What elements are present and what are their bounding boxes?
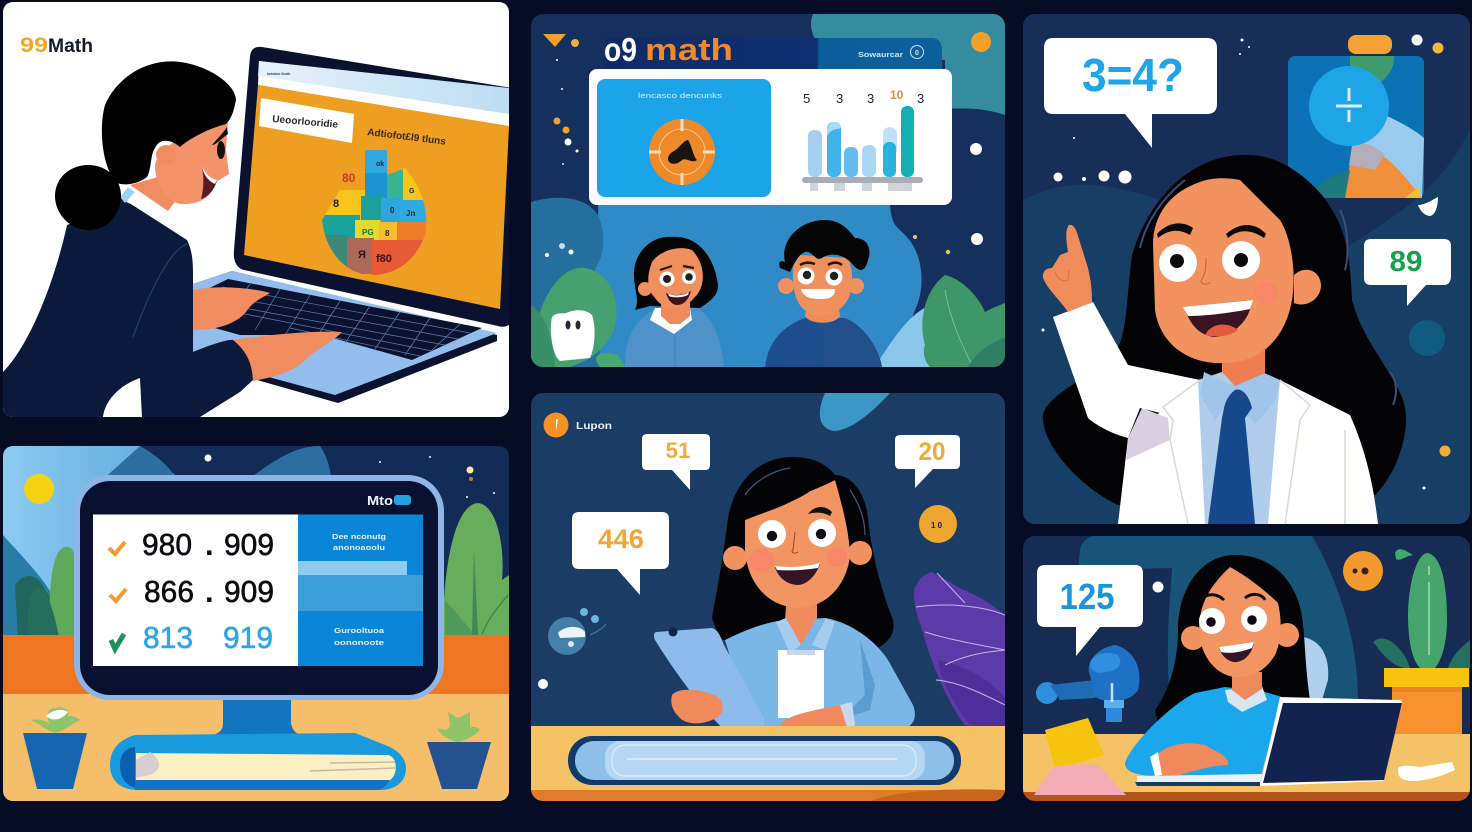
check mark <box>110 589 126 601</box>
girl student <box>625 237 724 367</box>
ears <box>1181 623 1299 650</box>
desk <box>531 726 1005 801</box>
teacher figure <box>3 61 342 417</box>
ear <box>1294 270 1321 304</box>
paper <box>778 650 824 718</box>
logo: o9 math: math <box>645 32 733 67</box>
sticky note <box>1045 718 1104 770</box>
bubble: 89: 89 <box>1390 246 1422 278</box>
laptop <box>1135 697 1402 786</box>
hair <box>102 61 236 184</box>
collar <box>776 618 835 653</box>
student figure <box>1125 555 1310 780</box>
sum rows: 980 <box>142 527 192 562</box>
blue side panel <box>298 514 423 666</box>
check mark <box>109 542 125 554</box>
left plant pot <box>23 707 87 789</box>
coat body <box>1118 380 1378 524</box>
screen title box: Ueoorlooridie <box>272 114 339 131</box>
face <box>1153 178 1294 363</box>
sum rows <box>109 527 274 655</box>
screen chart: Я <box>358 249 366 261</box>
hair <box>1043 155 1406 505</box>
crescent <box>1418 197 1438 216</box>
panel: student at desk with laptop <box>1023 536 1470 801</box>
blue background blobs <box>531 198 922 367</box>
teacher figure <box>1043 155 1406 524</box>
orange badge <box>919 505 957 543</box>
sum rows: . <box>205 574 214 609</box>
nose <box>1201 258 1210 284</box>
mouth <box>1183 300 1253 337</box>
ear <box>156 145 176 165</box>
lapels <box>1163 380 1345 524</box>
brows <box>1157 223 1266 238</box>
blue side panel: Gurooltuoa <box>334 626 385 635</box>
bubble: 446: 446 <box>598 524 644 554</box>
white dot <box>1152 582 1164 592</box>
panel: monitor with sums <box>3 446 509 801</box>
bubble: 125: 125 <box>1060 576 1114 617</box>
neck <box>1232 672 1262 700</box>
blue faucet object <box>1036 645 1139 722</box>
bar chart <box>802 88 924 191</box>
check mark <box>111 634 124 649</box>
eyes <box>758 519 836 548</box>
math card <box>1288 56 1424 198</box>
sweater <box>1125 687 1282 780</box>
white card <box>589 69 952 205</box>
left plant and mascot <box>531 268 625 367</box>
stars <box>204 454 495 498</box>
ground <box>3 635 509 801</box>
brand: Mto <box>367 493 393 508</box>
division icon <box>1309 66 1389 146</box>
logo: o9 math <box>605 38 731 62</box>
ears <box>723 541 872 570</box>
sum rows: 813 <box>143 620 193 655</box>
top <box>725 618 915 730</box>
blue shape <box>820 393 890 431</box>
screen chart: G <box>409 188 415 195</box>
bubble: 89 <box>1364 239 1451 306</box>
face <box>1199 567 1281 677</box>
desk <box>1023 734 1470 801</box>
face <box>745 480 850 608</box>
neck <box>785 592 817 645</box>
potted plant <box>1373 553 1470 735</box>
lower hand <box>233 332 342 381</box>
orange badge <box>1343 551 1383 591</box>
screen chart: 8 <box>333 198 339 210</box>
blue side panel: oononoote <box>334 638 384 647</box>
decorative dots <box>545 32 991 257</box>
blue tile: lencasco dencunks <box>638 93 723 100</box>
mouth <box>1219 642 1254 662</box>
mascot <box>551 310 595 361</box>
hand <box>1157 743 1228 775</box>
screen chart: ok <box>376 161 384 168</box>
mouth <box>775 563 820 585</box>
right plant pot <box>427 712 491 789</box>
hair bun <box>55 165 121 230</box>
blue tile <box>597 79 771 197</box>
sum rows: . <box>205 527 214 562</box>
upper hand <box>193 287 270 330</box>
header label <box>858 46 924 59</box>
blue side panel: anonoaoolu <box>333 543 386 552</box>
sum rows: 866 <box>144 574 194 609</box>
right hand <box>780 705 848 730</box>
screen chart: PG <box>362 228 374 237</box>
brows <box>1200 594 1265 600</box>
pink note <box>1034 764 1126 795</box>
decorative dots <box>1042 34 1450 490</box>
white object <box>1398 762 1455 781</box>
logo badge <box>544 412 612 438</box>
nose <box>208 150 228 178</box>
bar chart: 3 <box>867 91 874 106</box>
hair fringe <box>745 470 835 520</box>
logo: 99Math: 99 <box>20 34 48 57</box>
sky <box>3 446 175 700</box>
panel: teacher with white coat <box>1023 14 1470 524</box>
decorative triangle <box>543 34 566 47</box>
laptop base and keyboard <box>193 271 497 403</box>
bar chart: 3 <box>917 91 924 106</box>
neck <box>1222 350 1265 386</box>
orange pill <box>1348 35 1392 54</box>
brand <box>367 493 411 508</box>
bubble: 3=4?: 3=4? <box>1082 49 1184 101</box>
white dot <box>538 679 548 689</box>
nose <box>792 532 798 553</box>
neck <box>130 178 175 211</box>
hair <box>1155 555 1310 735</box>
hair <box>712 457 894 648</box>
bubble: 125 <box>1037 565 1143 656</box>
chair <box>1300 637 1328 700</box>
raised arm <box>1053 302 1200 438</box>
bar chart: 3 <box>836 91 843 106</box>
logo: o9 math: o9 <box>604 31 637 68</box>
sum rows: 909 <box>224 574 274 609</box>
header label: Sowaurcar <box>858 52 903 59</box>
panel: math dashboard with two students <box>531 14 1005 367</box>
sun <box>24 474 54 504</box>
student figure <box>654 457 915 731</box>
brow <box>808 507 832 516</box>
panel: teacher at laptop <box>3 2 512 417</box>
bubble: 3=4? <box>1044 38 1217 148</box>
book <box>568 736 961 785</box>
bubble: 446 <box>572 512 669 595</box>
screen chart: 0 <box>390 206 395 215</box>
shirt <box>1198 372 1280 524</box>
eyes <box>1199 606 1267 634</box>
logo badge: Lupon <box>576 421 612 432</box>
bar chart: 5 <box>803 91 810 106</box>
screen chart: 8 <box>385 229 390 238</box>
mouth <box>201 167 217 199</box>
purple leaves <box>914 572 1005 730</box>
face <box>155 122 229 204</box>
background arch <box>1078 536 1358 700</box>
bubble: 51: 51 <box>666 438 690 463</box>
orange target icon <box>649 119 715 185</box>
teal blob <box>811 14 1005 115</box>
cheeks <box>750 547 847 572</box>
screen chart: f80 <box>376 253 392 265</box>
sleeve <box>193 340 253 417</box>
jacket <box>3 198 202 417</box>
header bar <box>605 38 942 69</box>
eyes <box>1159 241 1260 282</box>
cheek <box>1254 281 1278 305</box>
collar <box>1225 686 1267 712</box>
teal circle <box>1409 320 1445 356</box>
bubble: 20 <box>895 435 960 488</box>
left hand <box>671 690 723 723</box>
laptop screen <box>234 47 512 327</box>
bar chart: 10 <box>890 88 904 102</box>
orange badge: 1 0 <box>931 521 943 530</box>
hand pointing <box>1043 225 1092 312</box>
screen heading: Adtiofot£l9 tluns <box>367 127 447 148</box>
coat sleeve shade <box>1126 408 1170 460</box>
monitor <box>74 475 444 700</box>
screen chart: Jn <box>406 209 415 218</box>
globe icon <box>548 608 606 655</box>
screen chart: 80 <box>342 171 356 185</box>
blue side panel: Dee nconutg <box>332 532 386 541</box>
screen chart: Iowaroo tbuth <box>267 72 290 76</box>
boy student <box>765 220 882 367</box>
monitor stand and book base <box>110 700 406 790</box>
panel: student with tablet <box>531 393 1005 801</box>
hills <box>3 446 509 640</box>
bubble: 20: 20 <box>918 438 946 466</box>
screen chart <box>267 72 430 276</box>
tablet <box>654 628 765 731</box>
logo: 99Math <box>20 38 92 52</box>
sum rows: 919 <box>223 620 273 655</box>
small leaf <box>1395 549 1413 560</box>
eye and brow <box>212 127 228 159</box>
bubble: 51 <box>642 434 710 490</box>
screen title box <box>259 98 354 143</box>
sum rows: 909 <box>224 527 274 562</box>
logo: 99Math: Math <box>48 36 93 57</box>
header label: 0 <box>915 50 919 57</box>
right plant <box>875 275 1005 367</box>
background wash <box>1023 130 1470 524</box>
tie <box>1208 390 1255 524</box>
